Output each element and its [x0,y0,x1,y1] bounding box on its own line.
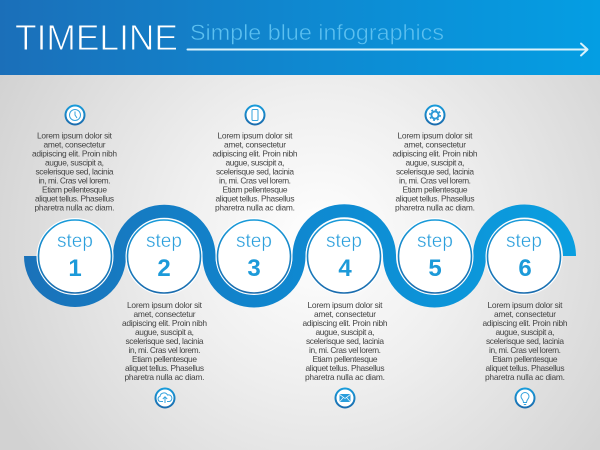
text block: step 3: amet, consectetur [224,140,286,150]
text block: step 3: augue, suscipit a, [226,158,284,168]
step 4: 4 [338,255,352,282]
text block: step 5: amet, consectetur [404,140,466,150]
text block: step 1: aliquet tellus. Phasellus [35,194,114,204]
text block: step 6: in, mi. Cras vel lorem. [489,345,561,355]
text block: step 6: adipiscing elit. Proin nibh [482,318,568,328]
arrow [188,44,588,56]
text block: step 4: amet, consectetur [314,309,376,319]
text block: step 6 [482,300,568,382]
text block: step 2: scelerisque sed, lacinia [126,336,204,346]
step 3: 3 [247,255,261,282]
text block: step 1: Lorem ipsum dolor sit [37,130,113,140]
text block: step 6: pharetra nulla ac diam. [485,372,565,382]
text block: step 4: adipiscing elit. Proin nibh [302,318,388,328]
icon: cloud upload [156,388,174,408]
text block: step 1: pharetra nulla ac diam. [34,202,114,212]
text block: step 3: adipiscing elit. Proin nibh [212,148,298,158]
text block: step 5: augue, suscipit a, [406,158,464,168]
step 1: step [57,231,93,252]
text block: step 1: augue, suscipit a, [45,158,104,168]
step 1 [36,218,114,295]
text block: step 2: Etiam pellentesque [132,354,197,364]
text block: step 2: amet, consectetur [134,309,196,319]
step 6: 6 [518,255,532,282]
step 5: step [417,231,453,252]
text block: step 5: Etiam pellentesque [402,184,468,194]
icon: clock [66,106,84,124]
text block: step 5: pharetra nulla ac diam. [395,202,475,212]
step 4: step [326,231,362,252]
step 1: 1 [68,255,82,282]
step 3 [216,218,292,295]
icon: gear [426,106,444,124]
text block: step 1: in, mi. Cras vel lorem. [38,176,110,186]
step 6 [486,218,562,295]
step 6: step [506,231,542,252]
step 2 [126,218,202,295]
title: TIMELINE [15,17,178,58]
icon: smartphone [246,106,264,124]
text block: step 2: Lorem ipsum dolor sit [127,300,203,310]
text block: step 3: scelerisque sed, lacinia [216,166,294,176]
text block: step 5 [392,130,478,212]
text block: step 6: aliquet tellus. Phasellus [486,363,564,373]
step 5: 5 [428,255,442,282]
text block: step 2: in, mi. Cras vel lorem. [128,345,200,355]
text block: step 1: amet, consectetur [44,140,106,150]
text block: step 6: augue, suscipit a, [496,327,554,337]
text block: step 3: pharetra nulla ac diam. [215,202,295,212]
text block: step 5: adipiscing elit. Proin nibh [392,148,478,158]
text block: step 4: pharetra nulla ac diam. [305,372,385,382]
text block: step 1: Etiam pellentesque [42,184,107,194]
text block: step 5: scelerisque sed, lacinia [396,166,474,176]
text block: step 3 [212,130,298,212]
text block: step 1: adipiscing elit. Proin nibh [32,148,117,158]
text block: step 4 [302,300,388,382]
text block: step 2 [122,300,207,382]
text block: step 5: in, mi. Cras vel lorem. [399,176,471,186]
subtitle: Simple blue infographics [190,20,444,45]
text block: step 4: augue, suscipit a, [316,327,374,337]
icon: light bulb [516,388,534,408]
step 5 [396,218,474,295]
text block: step 3: Etiam pellentesque [222,184,288,194]
text block: step 4: Etiam pellentesque [312,354,378,364]
text block: step 3: in, mi. Cras vel lorem. [219,176,291,186]
step 2: 2 [157,255,171,282]
icon: envelope [336,388,354,408]
text block: step 1: scelerisque sed, lacinia [36,166,114,176]
text block: step 4: aliquet tellus. Phasellus [306,363,384,373]
text block: step 2: pharetra nulla ac diam. [124,372,204,382]
text block: step 6: scelerisque sed, lacinia [486,336,564,346]
text block: step 1 [32,130,117,212]
text block: step 3: Lorem ipsum dolor sit [218,130,293,140]
text block: step 3: aliquet tellus. Phasellus [216,194,294,204]
header band [0,0,600,75]
text block: step 4: in, mi. Cras vel lorem. [309,345,381,355]
step 4 [306,218,382,295]
text block: step 6: Etiam pellentesque [492,354,558,364]
text block: step 4: scelerisque sed, lacinia [306,336,384,346]
text block: step 2: augue, suscipit a, [135,327,194,337]
text block: step 2: adipiscing elit. Proin nibh [122,318,207,328]
text block: step 5: aliquet tellus. Phasellus [396,194,474,204]
text block: step 2: aliquet tellus. Phasellus [125,363,204,373]
wave ribbon [30,211,570,301]
step 2: step [146,231,182,252]
text block: step 5: Lorem ipsum dolor sit [398,130,473,140]
step 3: step [236,231,272,252]
text block: step 6: Lorem ipsum dolor sit [488,300,563,310]
text block: step 4: Lorem ipsum dolor sit [308,300,383,310]
text block: step 6: amet, consectetur [494,309,556,319]
